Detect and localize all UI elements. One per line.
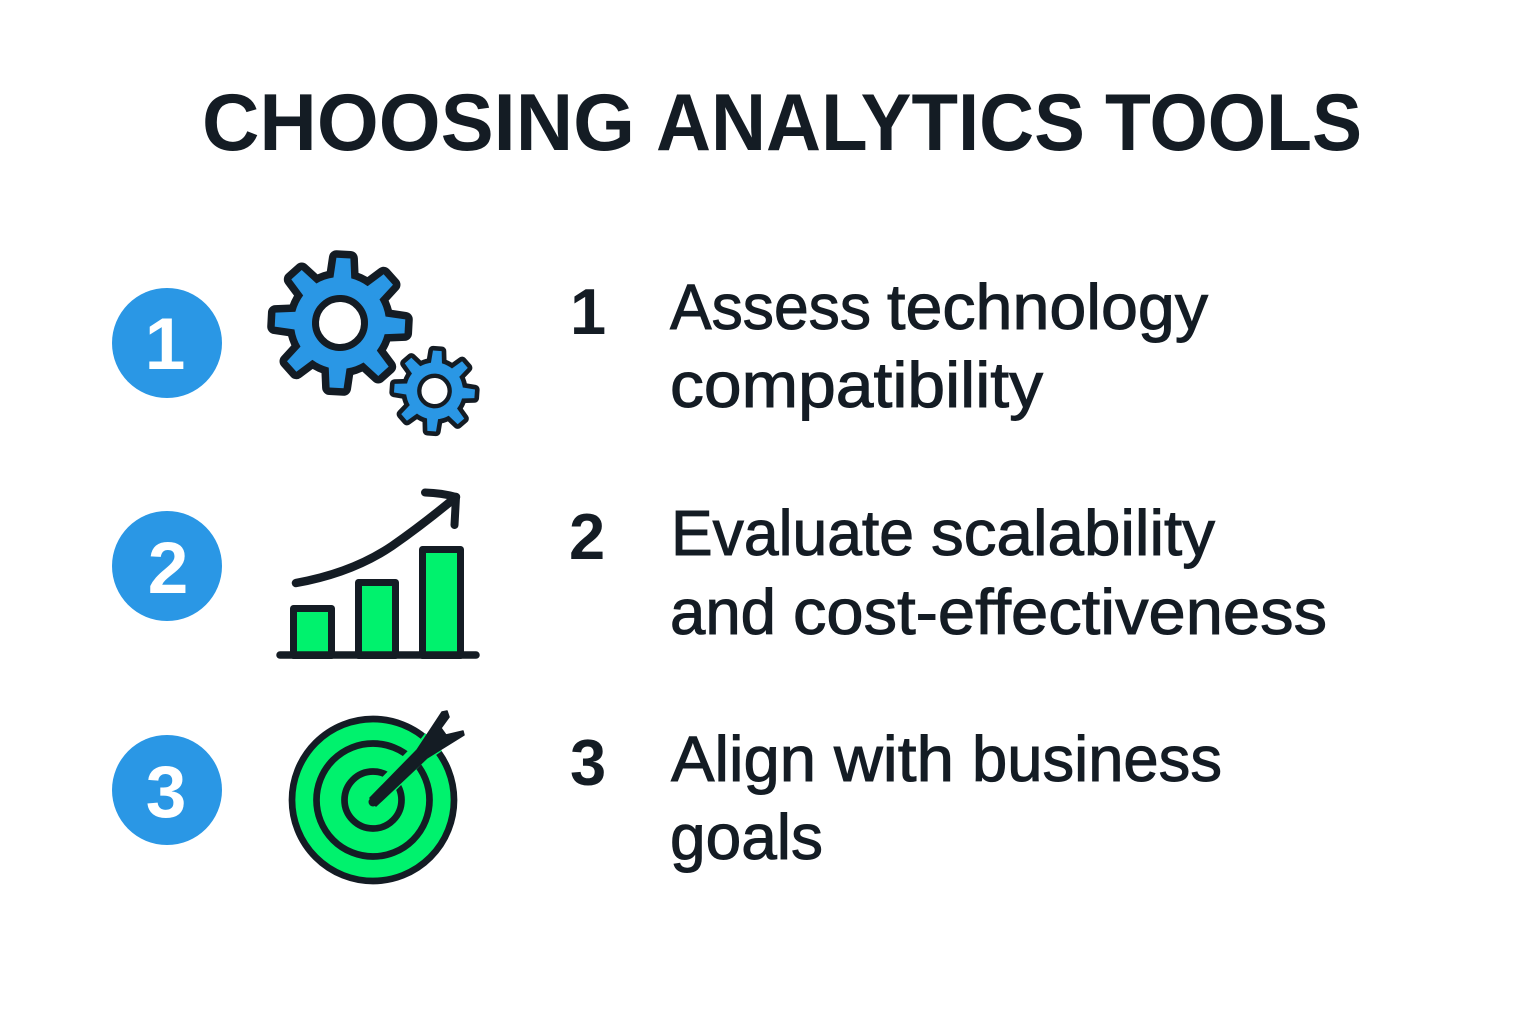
step 3 text: with: [833, 723, 954, 795]
step 3 text: goals: [670, 801, 823, 873]
step 3 text: business: [972, 723, 1222, 795]
icon: growth bar chart: [280, 492, 476, 656]
step 2 number: 2: [569, 500, 605, 573]
step 2 text: scalability: [931, 497, 1215, 569]
title: ANALYTICS: [656, 78, 1085, 168]
icon: target with arrow: [292, 711, 464, 881]
step 1 number: 1: [570, 275, 606, 348]
step 1 badge: [112, 288, 222, 398]
step 3 number: 3: [570, 726, 606, 799]
step 2 badge: [112, 511, 222, 621]
step 1 text: [670, 271, 1208, 421]
step 1 text: compatibility: [670, 349, 1043, 421]
step 2 badge: 2: [148, 528, 188, 609]
step 1 text: Assess: [670, 271, 871, 343]
title: TOOLS: [1105, 78, 1362, 168]
step 1 badge: 1: [145, 304, 185, 385]
step 2 text: cost-effectiveness: [793, 576, 1327, 648]
step 3 badge: [112, 735, 222, 845]
step 2 text: [670, 497, 1327, 648]
step 2 text: and: [670, 576, 776, 648]
title: [202, 78, 1362, 168]
icon: gears: [272, 255, 478, 434]
step 1 text: technology: [887, 271, 1208, 343]
step 2 text: Evaluate: [671, 497, 914, 569]
step 3 text: [670, 723, 1222, 873]
step 3 text: Align: [671, 723, 816, 795]
title: CHOOSING: [202, 78, 635, 168]
step 3 badge: 3: [146, 752, 186, 833]
